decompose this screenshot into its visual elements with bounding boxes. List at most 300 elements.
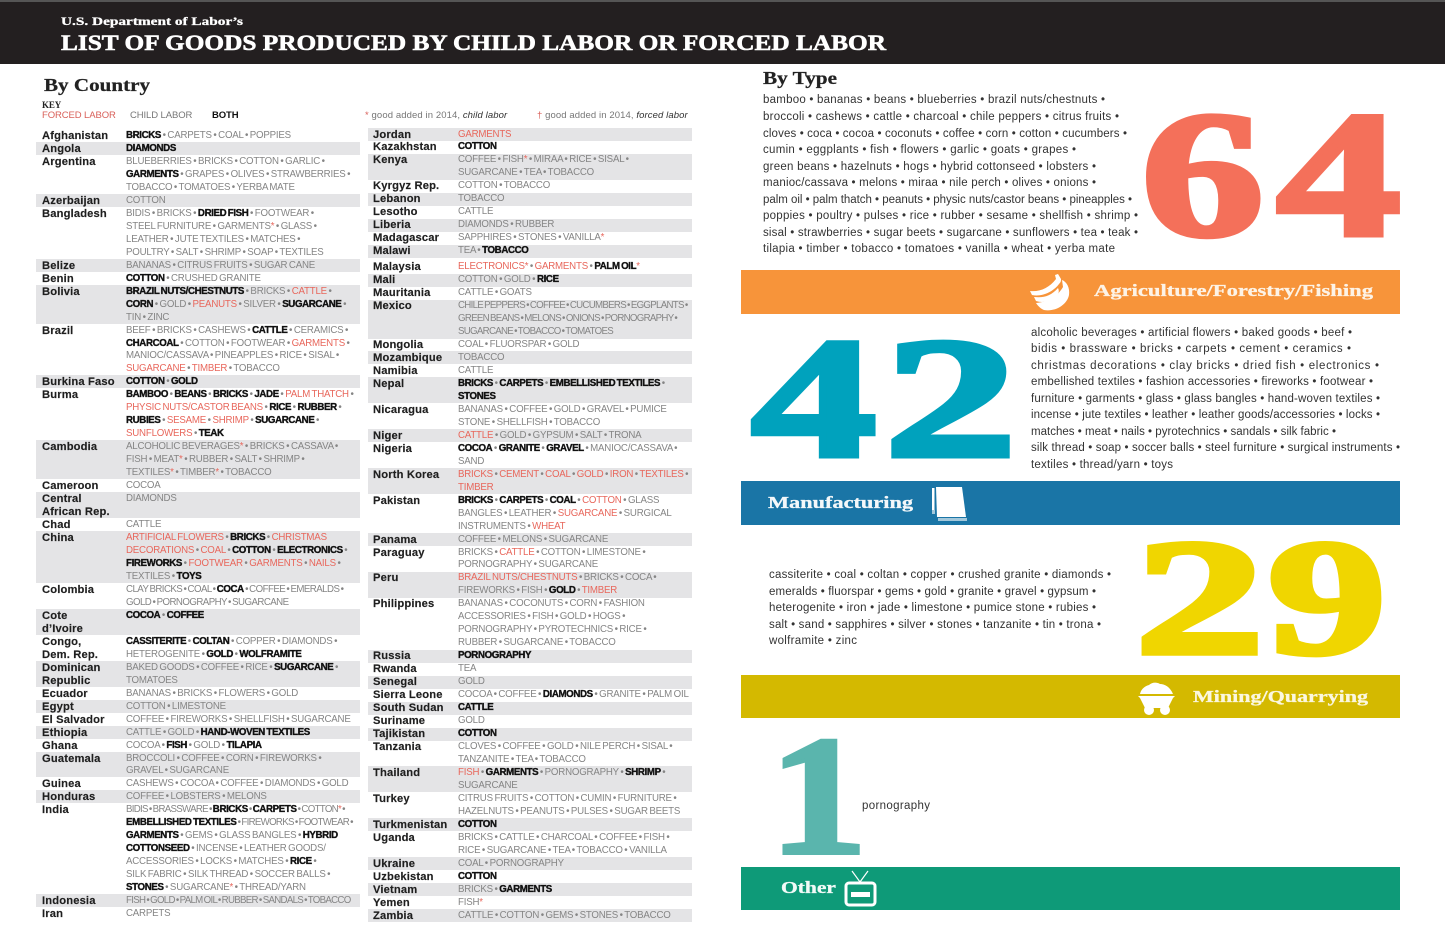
row: Mongolia: Mongolia: [373, 339, 423, 351]
row: Liberia: [368, 219, 692, 232]
row: Cote d'Ivoire: [36, 609, 360, 635]
row: Peru: [368, 572, 692, 598]
row: Congo, Dem. Rep.: Congo,: [42, 636, 81, 648]
heading: by country: By Country: [44, 75, 150, 95]
row: Vietnam: [368, 883, 692, 896]
number: 42: 4: [751, 303, 877, 494]
row: Pakistan: BRICKS • CARPETS • COAL • COTTON • GLASS: [458, 495, 659, 506]
row: Congo, Dem. Rep.: Dem. Rep.: [42, 649, 98, 661]
list: mining goods: [768, 569, 1111, 647]
list: agriculture goods: poppies • poultry • pulses • rice • rubber • sesame • shellfish • shrimp •: [763, 210, 1138, 222]
row: Afghanistan: [42, 130, 291, 142]
row: India: India: [42, 804, 69, 816]
row: Kyrgyz Rep.: Kyrgyz Rep.: [373, 180, 439, 192]
row: Yemen: [373, 897, 483, 909]
list: mining goods: cassiterite • coal • coltan • copper • crushed granite • diamonds •: [769, 569, 1111, 581]
row: Iran: CARPETS: [126, 908, 170, 919]
row: Panama: [368, 533, 692, 546]
band: manufacturing: [741, 481, 1400, 525]
row: Lesotho: Lesotho: [373, 206, 418, 218]
row: Angola: DIAMONDS: [126, 143, 176, 154]
number: 64: 6: [1141, 75, 1264, 274]
row: Angola: [36, 142, 360, 155]
row: Zambia: Zambia: [373, 910, 413, 922]
row: Russia: Russia: [373, 650, 411, 662]
row: North Korea: North Korea: [373, 469, 439, 481]
row: Malaysia: [373, 261, 640, 273]
row: Lebanon: [368, 193, 692, 206]
row: Brazil: [42, 325, 350, 374]
row: Jordan: Jordan: [373, 128, 411, 140]
icon: fabric roll: [932, 487, 967, 521]
row: Russia: PORNOGRAPHY: [458, 650, 531, 661]
list: manufacturing goods: christmas decorations • clay bricks • dried fish • electronics •: [1031, 360, 1379, 372]
row: Guatemala: BROCCOLI • COFFEE • CORN • FIREWORKS •: [126, 752, 322, 764]
row: Brazil: SUGARCANE • TIMBER • TOBACCO: [126, 363, 280, 374]
row: India: ACCESSORIES • LOCKS • MATCHES • RICE •: [126, 856, 317, 867]
row: Belize: Belize: [42, 260, 75, 272]
row: Honduras: Honduras: [42, 791, 95, 803]
row: Nigeria: SAND: [458, 456, 484, 467]
row: Pakistan: INSTRUMENTS • WHEAT: [458, 521, 565, 532]
row: Paraguay: Paraguay: [373, 546, 425, 558]
list: agriculture goods: palm oil • palm thatch • peanuts • physic nuts/castor beans • pineapples •: [763, 194, 1132, 206]
row: Mali: [368, 274, 692, 287]
list: agriculture goods: cumin • eggplants • fish • flowers • garlic • goats • grapes •: [763, 144, 1076, 156]
row: Burma: PHYSIC NUTS/CASTOR BEANS • RICE • RUBBER •: [126, 402, 342, 413]
row: Kazakhstan: Kazakhstan: [373, 141, 437, 153]
row: Congo, Dem. Rep.: HETEROGENITE • GOLD • WOLFRAMITE: [126, 649, 302, 660]
row: Nicaragua: Nicaragua: [373, 404, 428, 416]
row: Congo, Dem. Rep.: [42, 636, 338, 661]
row: Argentina: GARMENTS • GRAPES • OLIVES • STRAWBERRIES •: [126, 169, 350, 180]
row: Belize: [36, 259, 360, 272]
row: Panama: Panama: [373, 534, 417, 546]
list: manufacturing goods: embellished textiles • fashion accessories • fireworks • footwear •: [1031, 376, 1373, 388]
row: China: [36, 531, 360, 583]
row: Rwanda: [373, 663, 476, 675]
row: Afghanistan: Afghanistan: [42, 130, 108, 142]
row: Brazil: Brazil: [42, 325, 73, 337]
row: China: China: [42, 532, 74, 544]
row: Mali: Mali: [373, 274, 395, 286]
row: Uganda: BRICKS • CATTLE • CHARCOAL • COFFEE • FISH •: [458, 832, 670, 843]
row: Mali: COTTON • GOLD • RICE: [458, 274, 559, 285]
row: Tanzania: [373, 741, 672, 765]
number: 29: [1135, 506, 1386, 689]
band: agriculture: Agriculture/Forestry/Fishing: [1094, 281, 1374, 300]
row: Philippines: ACCESSORIES • FISH • GOLD • HOGS •: [458, 611, 625, 622]
row: South Sudan: CATTLE: [458, 702, 493, 713]
key: forced labor / child labor / both: CHILD LABOR: [130, 110, 192, 121]
row: Namibia: Namibia: [373, 365, 418, 377]
header banner: U.S. Department of Labor’s: [61, 14, 243, 28]
row: India: GARMENTS • GEMS • GLASS BANGLES • HYBRID: [126, 830, 338, 841]
row: Vietnam: Vietnam: [373, 884, 417, 896]
row: Argentina: BLUEBERRIES • BRICKS • COTTON • GARLIC •: [126, 156, 325, 167]
row: Thailand: SUGARCANE: [458, 780, 518, 791]
row: Panama: COFFEE • MELONS • SUGARCANE: [458, 534, 608, 545]
row: Namibia: [373, 365, 494, 377]
row: Russia: [368, 650, 692, 663]
row: Kazakhstan: [373, 141, 497, 153]
row: Central African Rep.: African Rep.: [42, 506, 110, 518]
row: Azerbaijan: Azerbaijan: [42, 195, 100, 207]
row: North Korea: TIMBER: [458, 482, 493, 493]
row: Kenya: Kenya: [373, 154, 407, 166]
row: Nicaragua: STONE • SHELLFISH • TOBACCO: [458, 417, 600, 428]
row: Pakistan: Pakistan: [373, 495, 420, 507]
row: Burma: Burma: [42, 389, 78, 401]
row: Nicaragua: [373, 404, 667, 428]
number: 64: 4: [1276, 76, 1401, 275]
row: Liberia: DIAMONDS • RUBBER: [458, 219, 554, 230]
row: Guatemala: GRAVEL • SUGARCANE: [126, 765, 229, 776]
row: Dominican Republic: BAKED GOODS • COFFEE • RICE • SUGARCANE •: [126, 662, 338, 673]
row: Bolivia: [36, 285, 360, 324]
row: Thailand: Thailand: [373, 767, 420, 779]
row: China: ARTIFICIAL FLOWERS • BRICKS • CHRISTMAS: [126, 532, 327, 543]
row: Mexico: CHILE PEPPERS • COFFEE • CUCUMBERS • EGGPLANTS •: [458, 300, 688, 311]
band: other: [741, 867, 1400, 910]
row: Jordan: [368, 128, 692, 141]
row: Afghanistan: BRICKS • CARPETS • COAL • POPPIES: [126, 130, 291, 141]
row: Rwanda: Rwanda: [373, 663, 417, 675]
row: Philippines: Philippines: [373, 598, 434, 610]
row: Dominican Republic: Republic: [42, 675, 90, 687]
table: countries A to I: [36, 130, 360, 920]
row: Mexico: GREEN BEANS • MELONS • ONIONS • PORNOGRAPHY •: [458, 313, 677, 324]
row: India: BIDIS • BRASSWARE • BRICKS • CARPETS • COTTON* •: [126, 804, 345, 815]
row: Paraguay: PORNOGRAPHY • SUGARCANE: [458, 559, 598, 570]
row: Turkmenistan: COTTON: [458, 819, 497, 830]
row: India: STONES • SUGARCANE* • THREAD/YARN: [126, 882, 306, 893]
row: Bangladesh: LEATHER • JUTE TEXTILES • MATCHES •: [126, 234, 300, 245]
row: Mexico: SUGARCANE • TOBACCO • TOMATOES: [458, 326, 613, 337]
list: mining goods: emeralds • fluorspar • gems • gold • granite • gravel • gypsum •: [769, 586, 1096, 598]
row: Mexico: Mexico: [373, 300, 412, 312]
row: Azerbaijan: COTTON: [126, 195, 166, 206]
key: forced labor / child labor / both: BOTH: [212, 110, 239, 121]
row: Guinea: Guinea: [42, 778, 81, 790]
row: India: EMBELLISHED TEXTILES • FIREWORKS • FOOTWEAR •: [126, 817, 353, 828]
row: Senegal: GOLD: [458, 676, 485, 687]
key: forced labor / child labor / both: [42, 100, 688, 121]
row: El Salvador: COFFEE • FIREWORKS • SHELLFISH • SUGARCANE: [126, 714, 351, 725]
list: agriculture goods: [763, 94, 1138, 255]
row: Liberia: Liberia: [373, 219, 411, 231]
row: Bolivia: CORN • GOLD • PEANUTS • SILVER • SUGARCANE •: [126, 299, 346, 310]
row: Brazil: BEEF • BRICKS • CASHEWS • CATTLE • CERAMICS •: [126, 325, 348, 336]
list: manufacturing goods: matches • meat • nails • pyrotechnics • sandals • silk fabric •: [1031, 426, 1336, 438]
row: Honduras: COFFEE • LOBSTERS • MELONS: [126, 791, 267, 802]
row: Bangladesh: POULTRY • SALT • SHRIMP • SOAP • TEXTILES: [126, 247, 324, 258]
row: Bolivia: TIN • ZINC: [126, 312, 169, 323]
row: Ukraine: COAL • PORNOGRAPHY: [458, 858, 564, 869]
list: agriculture goods: manioc/cassava • melons • miraa • nile perch • olives • onions •: [763, 177, 1096, 189]
row: Ethiopia: [36, 726, 360, 739]
row: India: COTTONSEED • INCENSE • LEATHER GOODS/: [126, 843, 326, 854]
row: Suriname: GOLD: [458, 715, 485, 726]
row: Paraguay: BRICKS • CATTLE • COTTON • LIMESTONE •: [458, 546, 646, 558]
list: mining goods: heterogenite • iron • jade • limestone • pumice stone • rubies •: [769, 602, 1096, 614]
row: Colombia: Colombia: [42, 584, 94, 596]
row: Ecuador: BANANAS • BRICKS • FLOWERS • GOLD: [126, 688, 298, 699]
number: 64: [1141, 75, 1401, 275]
row: Brazil: CHARCOAL • COTTON • FOOTWEAR • GARMENTS •: [126, 338, 350, 348]
row: Benin: Benin: [42, 273, 74, 285]
row: Thailand: [368, 766, 692, 792]
row: Uganda: RICE • SUGARCANE • TEA • TOBACCO • VANILLA: [458, 845, 667, 856]
list: mining goods: wolframite • zinc: [768, 635, 857, 647]
row: Nigeria: COCOA • GRANITE • GRAVEL • MANIOC/CASSAVA •: [458, 443, 677, 454]
list: manufacturing goods: textiles • thread/yarn • toys: [1031, 459, 1173, 471]
row: Central African Rep.: [36, 492, 360, 518]
row: Bangladesh: BIDIS • BRICKS • DRIED FISH • FOOTWEAR •: [126, 208, 314, 219]
row: Azerbaijan: [36, 194, 360, 207]
row: Tanzania: TANZANITE • TEA • TOBACCO: [458, 754, 586, 765]
row: Turkey: CITRUS FRUITS • COTTON • CUMIN • FURNITURE •: [458, 793, 677, 804]
row: Tajikistan: [368, 728, 692, 741]
row: Philippines: BANANAS • COCONUTS • CORN • FASHION: [458, 598, 645, 609]
row: Burma: SUNFLOWERS • TEAK: [126, 428, 224, 439]
row: Guinea: CASHEWS • COCOA • COFFEE • DIAMONDS • GOLD: [126, 778, 348, 789]
row: Peru: Peru: [373, 572, 398, 584]
row: Sierra Leone: COCOA • COFFEE • DIAMONDS • GRANITE • PALM OIL: [458, 689, 689, 700]
row: Suriname: [373, 715, 485, 727]
row: Mongolia: [373, 339, 579, 351]
row: Uzbekistan: Uzbekistan: [373, 871, 434, 883]
key: forced labor / child labor / both: * good added in 2014, child labor: [365, 110, 507, 121]
row: Lesotho: [373, 206, 494, 218]
icon: mine cart: [1138, 683, 1175, 715]
row: Central African Rep.: Central: [42, 493, 82, 505]
row: Paraguay: [373, 546, 646, 570]
row: Mauritania: Mauritania: [373, 287, 430, 299]
row: Niger: Niger: [373, 430, 402, 442]
row: Zambia: [368, 909, 692, 922]
row: Dominican Republic: Dominican: [42, 662, 101, 674]
row: Burma: BAMBOO • BEANS • BRICKS • JADE • PALM THATCH •: [126, 389, 354, 400]
row: Kenya: SUGARCANE • TEA • TOBACCO: [458, 167, 594, 178]
row: Tajikistan: Tajikistan: [373, 728, 425, 740]
row: Zambia: CATTLE • COTTON • GEMS • STONES • TOBACCO: [458, 910, 671, 921]
row: Cambodia: ALCOHOLIC BEVERAGES* • BRICKS • CASSAVA •: [126, 441, 338, 452]
row: Ukraine: Ukraine: [373, 858, 415, 870]
row: Sierra Leone: Sierra Leone: [373, 689, 443, 701]
row: Senegal: Senegal: [373, 676, 417, 688]
row: Malaysia: Malaysia: [373, 261, 421, 273]
list: agriculture goods: bamboo • bananas • beans • blueberries • brazil nuts/chestnuts •: [763, 94, 1105, 106]
row: Dominican Republic: TOMATOES: [126, 675, 178, 686]
number: 29: 2: [1135, 506, 1265, 689]
row: Argentina: Argentina: [42, 156, 96, 168]
row: South Sudan: South Sudan: [373, 702, 444, 714]
band: other: Other: [781, 878, 837, 897]
row: Mozambique: [368, 351, 692, 364]
key: forced labor / child labor / both: FORCED LABOR: [42, 110, 116, 121]
row: Kenya: COFFEE • FISH* • MIRAA • RICE • SISAL •: [458, 154, 629, 165]
row: Kyrgyz Rep.: [373, 180, 550, 192]
row: Turkmenistan: Turkmenistan: [373, 819, 447, 831]
row: Philippines: RUBBER • SUGARCANE • TOBACCO: [458, 637, 616, 648]
row: Benin: COTTON • CRUSHED GRANITE: [126, 273, 261, 284]
row: Namibia: CATTLE: [458, 365, 493, 376]
row: North Korea: BRICKS • CEMENT • COAL • GOLD • IRON • TEXTILES •: [458, 469, 688, 480]
list: manufacturing goods: bidis • brassware • bricks • carpets • cement • ceramics •: [1031, 343, 1351, 355]
row: Nigeria: Nigeria: [373, 443, 412, 455]
row: Argentina: TOBACCO • TOMATOES • YERBA MATE: [126, 182, 295, 193]
row: Malawi: [368, 245, 692, 258]
row: China: FIREWORKS • FOOTWEAR • GARMENTS • NAILS •: [126, 558, 341, 569]
row: Iran: Iran: [42, 908, 63, 920]
row: Egypt: [36, 700, 360, 713]
label: pornography: pornography: [862, 800, 930, 812]
row: Burma: [42, 389, 354, 439]
row: Cote d'Ivoire: COCOA • COFFEE: [126, 610, 204, 621]
row: Colombia: GOLD • PORNOGRAPHY • SUGARCANE: [126, 597, 289, 608]
list: manufacturing goods: [1031, 327, 1400, 471]
row: Angola: Angola: [42, 143, 81, 155]
row: Mexico: [368, 300, 692, 338]
row: Nigeria: [373, 443, 678, 467]
row: Malawi: TEA • TOBACCO: [458, 245, 528, 256]
row: Rwanda: TEA: [458, 663, 476, 674]
list: manufacturing goods: incense • jute textiles • leather • leather goods/accessories • locks •: [1031, 409, 1380, 421]
row: Yemen: FISH*: [458, 897, 483, 908]
header banner: [0, 0, 1445, 64]
row: Tanzania: CLOVES • COFFEE • GOLD • NILE PERCH • SISAL •: [458, 741, 672, 752]
list: manufacturing goods: furniture • garments • glass • glass bangles • hand-woven textiles •: [1031, 393, 1380, 405]
row: Ecuador: [42, 688, 298, 700]
row: India: SILK FABRIC • SILK THREAD • SOCCER BALLS •: [126, 869, 330, 880]
row: Malaysia: ELECTRONICS* • GARMENTS • PALM OIL*: [458, 261, 640, 272]
row: Niger: CATTLE • GOLD • GYPSUM • SALT • TRONA: [458, 430, 641, 441]
row: Yemen: Yemen: [373, 897, 410, 909]
heading: by type: By Type: [763, 68, 837, 88]
row: Nepal: [368, 377, 692, 403]
number: 42: [751, 303, 1017, 494]
row: Uganda: Uganda: [373, 832, 415, 844]
row: Burkina Faso: COTTON • GOLD: [126, 376, 198, 387]
row: Indonesia: Indonesia: [42, 895, 96, 907]
row: Egypt: COTTON • LIMESTONE: [126, 701, 226, 712]
band: agriculture: [741, 270, 1400, 314]
row: Mozambique: TOBACCO: [458, 352, 504, 363]
row: Ghana: Ghana: [42, 740, 78, 752]
row: Cameroon: COCOA: [126, 480, 161, 491]
list: agriculture goods: broccoli • cashews • cattle • charcoal • chile peppers • citrus fruits •: [763, 111, 1119, 123]
row: Honduras: [36, 790, 360, 803]
row: Nicaragua: BANANAS • COFFEE • GOLD • GRAVEL • PUMICE: [458, 404, 667, 415]
list: manufacturing goods: silk thread • soap • soccer balls • steel furniture • surgical instruments •: [1031, 442, 1400, 454]
row: Kyrgyz Rep.: COTTON • TOBACCO: [458, 180, 550, 191]
row: Ethiopia: Ethiopia: [42, 727, 87, 739]
row: Bolivia: Bolivia: [42, 286, 80, 298]
icon: bananas: [1030, 274, 1069, 310]
row: Belize: BANANAS • CITRUS FRUITS • SUGAR CANE: [126, 260, 315, 271]
row: China: DECORATIONS • COAL • COTTON • ELECTRONICS •: [126, 545, 348, 556]
row: Cambodia: TEXTILES* • TIMBER* • TOBACCO: [126, 467, 271, 478]
row: Madagascar: Madagascar: [373, 232, 439, 244]
row: Uzbekistan: [373, 871, 497, 883]
row: Central African Rep.: DIAMONDS: [126, 493, 177, 504]
row: South Sudan: [368, 702, 692, 715]
row: Kenya: [368, 154, 692, 180]
row: Madagascar: [373, 232, 604, 244]
number: 42: 2: [884, 303, 1017, 494]
band: manufacturing: Manufacturing: [768, 493, 914, 512]
list: manufacturing goods: alcoholic beverages • artificial flowers • baked goods • beef •: [1031, 327, 1352, 339]
row: Dominican Republic: [36, 661, 360, 687]
row: Iran: [42, 908, 170, 920]
row: Philippines: PORNOGRAPHY • PYROTECHNICS • RICE •: [458, 624, 647, 635]
list: agriculture goods: sisal • strawberries • sugar beets • sugarcane • sunflowers • tea • teak •: [763, 227, 1138, 239]
row: Chad: Chad: [42, 519, 71, 531]
row: Cameroon: [42, 480, 161, 492]
row: Colombia: CLAY BRICKS • COAL • COCA • COFFEE • EMERALDS •: [126, 584, 343, 595]
row: Kazakhstan: COTTON: [458, 141, 497, 152]
row: Pakistan: [373, 495, 672, 532]
row: Bangladesh: [42, 208, 324, 258]
row: Cambodia: FISH • MEAT* • RUBBER • SALT • SHRIMP •: [126, 454, 305, 465]
row: Lebanon: Lebanon: [373, 193, 421, 205]
row: Indonesia: [36, 894, 360, 907]
header banner: LIST OF GOODS PRODUCED BY CHILD LABOR OR FORCED LABOR: [61, 30, 887, 55]
row: Lebanon: TOBACCO: [458, 193, 504, 204]
row: Argentina: [42, 156, 350, 193]
row: Bangladesh: Bangladesh: [42, 208, 107, 220]
row: Uzbekistan: COTTON: [458, 871, 497, 882]
row: Benin: [42, 273, 261, 285]
key: forced labor / child labor / both: KEY: [42, 100, 61, 110]
band: mining: [741, 675, 1400, 718]
row: Uganda: [373, 832, 670, 856]
row: Mozambique: Mozambique: [373, 352, 442, 364]
key: forced labor / child labor / both: † good added in 2014, forced labor: [537, 110, 688, 121]
row: Colombia: [42, 584, 344, 608]
row: Guatemala: Guatemala: [42, 752, 101, 764]
row: Burma: RUBIES • SESAME • SHRIMP • SUGARCANE •: [126, 415, 319, 426]
row: Mauritania: [373, 287, 532, 299]
row: Niger: [368, 429, 692, 442]
row: Cote d'Ivoire: d’Ivoire: [42, 623, 83, 635]
number: 1: 1: [769, 702, 868, 890]
row: Guatemala: [36, 752, 360, 777]
row: Turkey: Turkey: [373, 793, 410, 805]
row: Turkey: HAZELNUTS • PEANUTS • PULSES • SUGAR BEETS: [458, 806, 680, 817]
row: Pakistan: BANGLES • LEATHER • SUGARCANE • SURGICAL: [458, 508, 672, 519]
row: Ecuador: Ecuador: [42, 688, 88, 700]
row: Nepal: STONES: [458, 391, 496, 402]
row: North Korea: [368, 468, 692, 494]
row: Suriname: Suriname: [373, 715, 425, 727]
row: China: TEXTILES • TOYS: [126, 571, 201, 582]
row: Sierra Leone: [373, 689, 689, 701]
row: Cambodia: [36, 440, 360, 479]
icon: television: [846, 871, 875, 905]
row: Lesotho: CATTLE: [458, 206, 493, 217]
row: Nepal: BRICKS • CARPETS • EMBELLISHED TEXTILES •: [458, 378, 665, 389]
row: Chad: CATTLE: [126, 519, 161, 530]
row: Peru: FIREWORKS • FISH • GOLD • TIMBER: [458, 585, 617, 596]
row: Nepal: Nepal: [373, 378, 404, 390]
row: Guinea: [42, 778, 348, 790]
number: 29: 9: [1268, 507, 1386, 689]
row: Egypt: Egypt: [42, 701, 74, 713]
row: El Salvador: [42, 714, 351, 726]
row: Peru: BRAZIL NUTS/CHESTNUTS • BRICKS • COCA •: [458, 572, 656, 583]
